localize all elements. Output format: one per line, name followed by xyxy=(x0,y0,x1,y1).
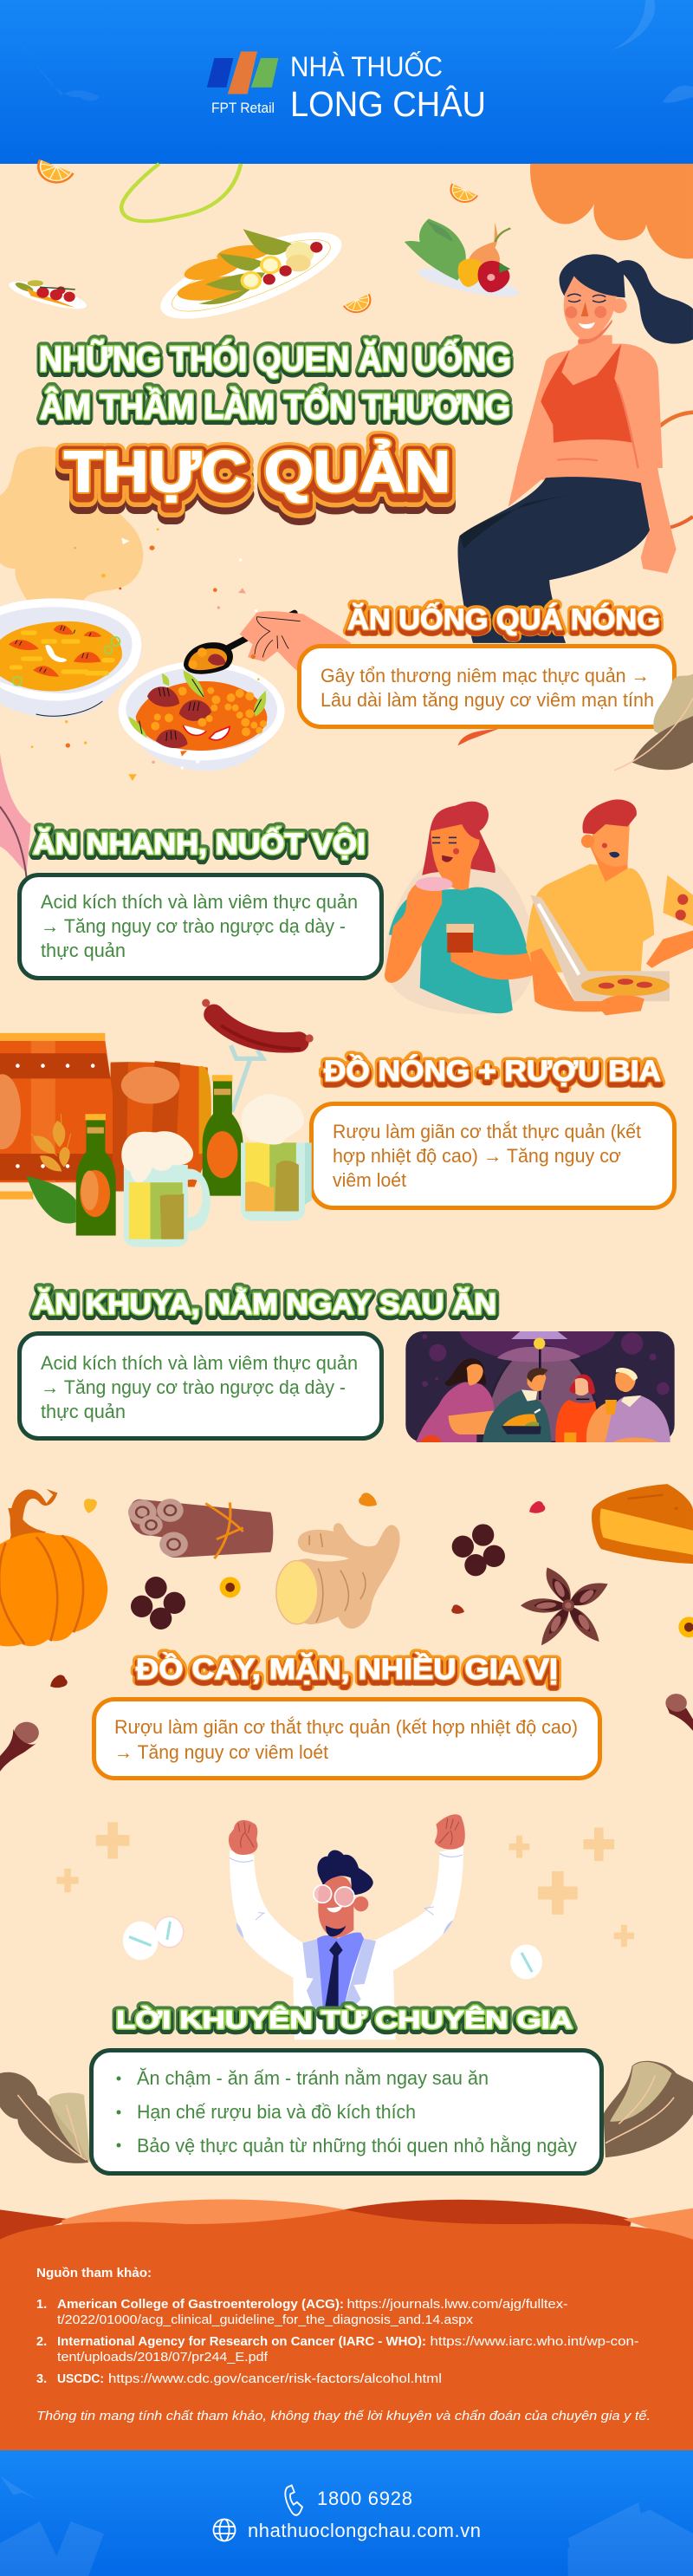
heading: Ăn nhanh, nuốt vội: ĂN NHANH, NUỐT VỘI xyxy=(33,827,366,861)
panel: đồ cay, mặn, nhiều gia vị: → Tăng nguy cơ viêm loét xyxy=(114,1741,329,1763)
panel: đồ cay, mặn, nhiều gia vị xyxy=(94,1699,599,1779)
star anise xyxy=(521,1567,608,1645)
heading: Ăn nhanh, nuốt vội: ĂN NHANH, NUỐT VỘI xyxy=(33,827,366,861)
sunflower xyxy=(220,1577,241,1597)
person 2 xyxy=(483,1390,551,1442)
reference 2: https://www.iarc.who.int/wp-con- xyxy=(430,2335,639,2349)
panel: ăn khuya, nằm ngay sau ăn: Acid kích thích và làm viêm thực quản xyxy=(41,1352,358,1374)
title: THỰC QUẢN: THỰC QUẢN xyxy=(64,446,450,511)
panel: đồ nóng + rượu bia: viêm loét xyxy=(333,1169,407,1191)
person 4 xyxy=(606,1395,670,1442)
berries left xyxy=(131,1577,185,1630)
icon: pills xyxy=(123,1916,542,1980)
title: THỰC QUẢN: THỰC QUẢN xyxy=(64,453,450,518)
spoon and hand xyxy=(184,611,351,676)
panel: ăn nhanh, nuốt vội xyxy=(19,875,381,978)
panel: ăn khuya, nằm ngay sau ăn: → Tăng nguy cơ trào ngược dạ dày - xyxy=(41,1376,346,1398)
advice list: Hạn chế rượu bia và đồ kích thích xyxy=(137,2101,416,2123)
heading: Ăn nhanh, nuốt vội: ĂN NHANH, NUỐT VỘI xyxy=(33,827,366,861)
icon: orange slices xyxy=(30,159,478,317)
reference 2: 2. xyxy=(36,2335,47,2349)
person 3 xyxy=(555,1400,601,1442)
heading: Đồ cay, mặn, nhiều gia vị: ĐỒ CAY, MẶN, NHIỀU GIA VỊ xyxy=(136,1653,558,1686)
illustration: two people eating fast xyxy=(385,799,693,1015)
contact: website: nhathuoclongchau.com.vn xyxy=(248,2520,481,2541)
barrel front xyxy=(0,1033,113,1200)
panel: ăn nhanh, nuốt vội: → Tăng nguy cơ trào ngược dạ dày - xyxy=(41,915,346,937)
small leaves and flowers xyxy=(47,1491,547,1692)
panel: ăn uống quá nóng: Lâu dài làm tăng nguy cơ viêm mạn tính xyxy=(321,689,654,711)
main title xyxy=(39,339,511,518)
panel: đồ nóng + rượu bia xyxy=(312,1104,674,1208)
title: THỰC QUẢN: THỰC QUẢN xyxy=(64,439,450,504)
man with pizza xyxy=(526,799,693,1015)
berries right xyxy=(452,1524,505,1576)
sunflower edge xyxy=(678,1617,693,1637)
waves and references band xyxy=(0,2200,693,2451)
mug right xyxy=(241,1094,312,1221)
logo text: LONG CHÂU xyxy=(290,84,486,124)
reference 3: 3. xyxy=(36,2372,47,2386)
panel: ăn khuya, nằm ngay sau ăn: thực quản xyxy=(41,1401,126,1422)
heading: Ăn khuya, nằm ngay sau ăn: ĂN KHUYA, NẰM NGAY SAU ĂN xyxy=(33,1288,496,1321)
header band xyxy=(0,0,693,164)
panel: ăn khuya, nằm ngay sau ăn xyxy=(19,1333,381,1439)
panel: ăn uống quá nóng: Gây tổn thương niêm mạc thực quản → xyxy=(321,665,650,686)
decorative medical crosses xyxy=(56,1822,634,1947)
heading: Lời khuyên từ chuyên gia: LỜI KHUYÊN TỪ CHUYÊN GIA xyxy=(116,2005,573,2034)
wheat and leaves xyxy=(27,1114,76,1223)
reference 2: tent/uploads/2018/07/pr244_E.pdf xyxy=(57,2351,269,2365)
title line 2: ÂM THẦM LÀM TỔN THƯƠNG xyxy=(40,388,510,429)
title line 1: NHỮNG THÓI QUEN ĂN UỐNG xyxy=(39,339,511,379)
reference 1: 1. xyxy=(36,2298,47,2312)
panel: ăn nhanh, nuốt vội: thực quản xyxy=(41,940,126,961)
sausage xyxy=(202,999,314,1049)
title line 2: ÂM THẦM LÀM TỔN THƯƠNG xyxy=(40,386,510,426)
illustration: spices and autumn foods xyxy=(0,1484,693,1772)
panel: đồ nóng + rượu bia: Rượu làm giãn cơ thắt thực quản (kết xyxy=(333,1121,642,1142)
heading: Ăn khuya, nằm ngay sau ăn: ĂN KHUYA, NẰM NGAY SAU ĂN xyxy=(33,1288,496,1321)
icon: globe xyxy=(213,2519,236,2541)
pumpkin xyxy=(0,1489,107,1646)
bottle right xyxy=(203,1075,243,1196)
woman with donut xyxy=(385,802,534,1014)
leaf overlapping panel xyxy=(614,674,693,771)
heading: Ăn uống quá nóng: ĂN UỐNG QUÁ NÓNG xyxy=(347,606,660,640)
illustration: barrels, sausage, bottles and beer xyxy=(0,999,314,1247)
illustration: two soup bowls with spoon xyxy=(0,588,351,781)
bottle left xyxy=(76,1114,116,1236)
illustration: vegetable plate xyxy=(405,218,521,302)
reference 1 xyxy=(36,2298,568,2327)
contact: phone: 1800 6928 xyxy=(317,2488,412,2509)
disclaimer: Thông tin mang tính chất tham khảo, không thay thế lời khuyên và chẩn đoán của chuyên gia y tế. xyxy=(36,2410,651,2423)
icon: phone xyxy=(285,2485,302,2515)
heading: Đồ nóng + rượu bia: ĐỒ NÓNG + RƯỢU BIA xyxy=(324,1057,661,1090)
illustration: woman sitting xyxy=(457,254,693,745)
reference 2 xyxy=(36,2335,639,2365)
advice list: Bảo vệ thực quản từ những thói quen nhỏ hằng ngày xyxy=(137,2135,578,2156)
contact: phone xyxy=(285,2485,412,2515)
title line 1: NHỮNG THÓI QUEN ĂN UỐNG xyxy=(39,339,511,379)
person 1 xyxy=(416,1381,494,1442)
reference 1: https://journals.lww.com/ajg/fulltex- xyxy=(346,2298,568,2312)
heading: Ăn uống quá nóng: ĂN UỐNG QUÁ NÓNG xyxy=(347,602,660,636)
title line 2: ÂM THẦM LÀM TỔN THƯƠNG xyxy=(40,386,510,426)
title line 1: NHỮNG THÓI QUEN ĂN UỐNG xyxy=(39,339,511,379)
heading: Lời khuyên từ chuyên gia: LỜI KHUYÊN TỪ CHUYÊN GIA xyxy=(116,2007,573,2037)
panel: ăn nhanh, nuốt vội: Acid kích thích và làm viêm thực quản xyxy=(41,891,358,913)
illustration: friends eating at night xyxy=(405,1331,675,1442)
panel: lời khuyên xyxy=(92,2051,601,2174)
heading: Ăn uống quá nóng: ĂN UỐNG QUÁ NÓNG xyxy=(347,604,660,638)
heading: Đồ nóng + rượu bia: ĐỒ NÓNG + RƯỢU BIA xyxy=(324,1055,661,1088)
barrel back xyxy=(111,1061,211,1191)
title: THỰC QUẢN: THỰC QUẢN xyxy=(64,445,450,510)
logo text: FPT Retail xyxy=(211,100,275,116)
cinnamon xyxy=(128,1499,273,1558)
icon: FPT logo xyxy=(207,51,278,94)
heading: Ăn nhanh, nuốt vội: ĂN NHANH, NUỐT VỘI xyxy=(33,829,366,863)
ginger xyxy=(276,1523,400,1629)
decorative pink shape xyxy=(0,753,31,877)
heading: Ăn uống quá nóng: ĂN UỐNG QUÁ NÓNG xyxy=(347,602,660,636)
heading: Đồ cay, mặn, nhiều gia vị: ĐỒ CAY, MẶN, NHIỀU GIA VỊ xyxy=(136,1655,558,1688)
cloves xyxy=(0,1694,693,1772)
reference 1: t/2022/01000/acg_clinical_guideline_for_the_diagnosis_and.14.aspx xyxy=(57,2313,474,2327)
heading: Lời khuyên từ chuyên gia: LỜI KHUYÊN TỪ CHUYÊN GIA xyxy=(116,2005,573,2034)
footer band xyxy=(0,2450,693,2576)
title line 2: ÂM THẦM LÀM TỔN THƯƠNG xyxy=(40,386,510,426)
scattered dots xyxy=(31,588,260,781)
title: THỰC QUẢN: THỰC QUẢN xyxy=(64,439,450,504)
logo text xyxy=(211,51,486,124)
advice list: Ăn chậm - ăn ấm - tránh nằm ngay sau ăn xyxy=(137,2067,489,2089)
mug left xyxy=(121,1131,210,1247)
heading: Ăn khuya, nằm ngay sau ăn: ĂN KHUYA, NẰM NGAY SAU ĂN xyxy=(33,1288,496,1321)
bowl left xyxy=(0,598,141,719)
heading: Đồ cay, mặn, nhiều gia vị: ĐỒ CAY, MẶN, NHIỀU GIA VỊ xyxy=(136,1656,558,1689)
heading: Đồ cay, mặn, nhiều gia vị: ĐỒ CAY, MẶN, NHIỀU GIA VỊ xyxy=(136,1653,558,1686)
illustration: leaves beside advice panel xyxy=(0,2061,693,2163)
heading: Ăn khuya, nằm ngay sau ăn: ĂN KHUYA, NẰM NGAY SAU ĂN xyxy=(33,1291,496,1324)
references xyxy=(36,2267,651,2423)
panel: đồ nóng + rượu bia: hợp nhiệt độ cao) → Tăng nguy cơ xyxy=(333,1145,621,1167)
heading: Lời khuyên từ chuyên gia xyxy=(116,2005,573,2037)
logo: FPT Retail Nhà Thuốc Long Châu xyxy=(207,51,486,124)
title line 1: NHỮNG THÓI QUEN ĂN UỐNG xyxy=(39,342,511,381)
reference 1: American College of Gastroenterology (ACG): xyxy=(57,2298,344,2312)
illustration: doctor with raised arms xyxy=(229,1814,465,2039)
reference 3: https://www.cdc.gov/cancer/risk-factors/alcohol.html xyxy=(108,2372,442,2386)
illustration: corn plate xyxy=(148,215,353,336)
panel: đồ cay, mặn, nhiều gia vị: Rượu làm giãn cơ thắt thực quản (kết hợp nhiệt độ cao) xyxy=(114,1716,578,1738)
decorative background shapes, top xyxy=(0,164,693,602)
reference 3: USCDC: xyxy=(57,2372,104,2386)
heading: Lời khuyên từ chuyên gia: LỜI KHUYÊN TỪ CHUYÊN GIA xyxy=(116,2005,573,2034)
title: THỰC QUẢN: THỰC QUẢN xyxy=(64,439,450,504)
reference 2: International Agency for Research on Cancer (IARC - WHO): xyxy=(57,2335,426,2349)
advice list xyxy=(116,2067,578,2156)
references heading: Nguồn tham khảo: xyxy=(36,2267,152,2280)
illustration: small tomato plate xyxy=(6,276,89,315)
panel: ăn uống quá nóng xyxy=(300,647,674,726)
logo text: NHÀ THUỐC xyxy=(290,51,443,82)
pie xyxy=(592,1484,693,1564)
title: THỰC QUẢN: THỰC QUẢN xyxy=(64,439,450,504)
heading: Đồ nóng + rượu bia: ĐỒ NÓNG + RƯỢU BIA xyxy=(324,1058,661,1091)
heading: Đồ nóng + rượu bia: ĐỒ NÓNG + RƯỢU BIA xyxy=(324,1055,661,1088)
fork xyxy=(230,1045,263,1112)
bowl right xyxy=(119,661,285,771)
